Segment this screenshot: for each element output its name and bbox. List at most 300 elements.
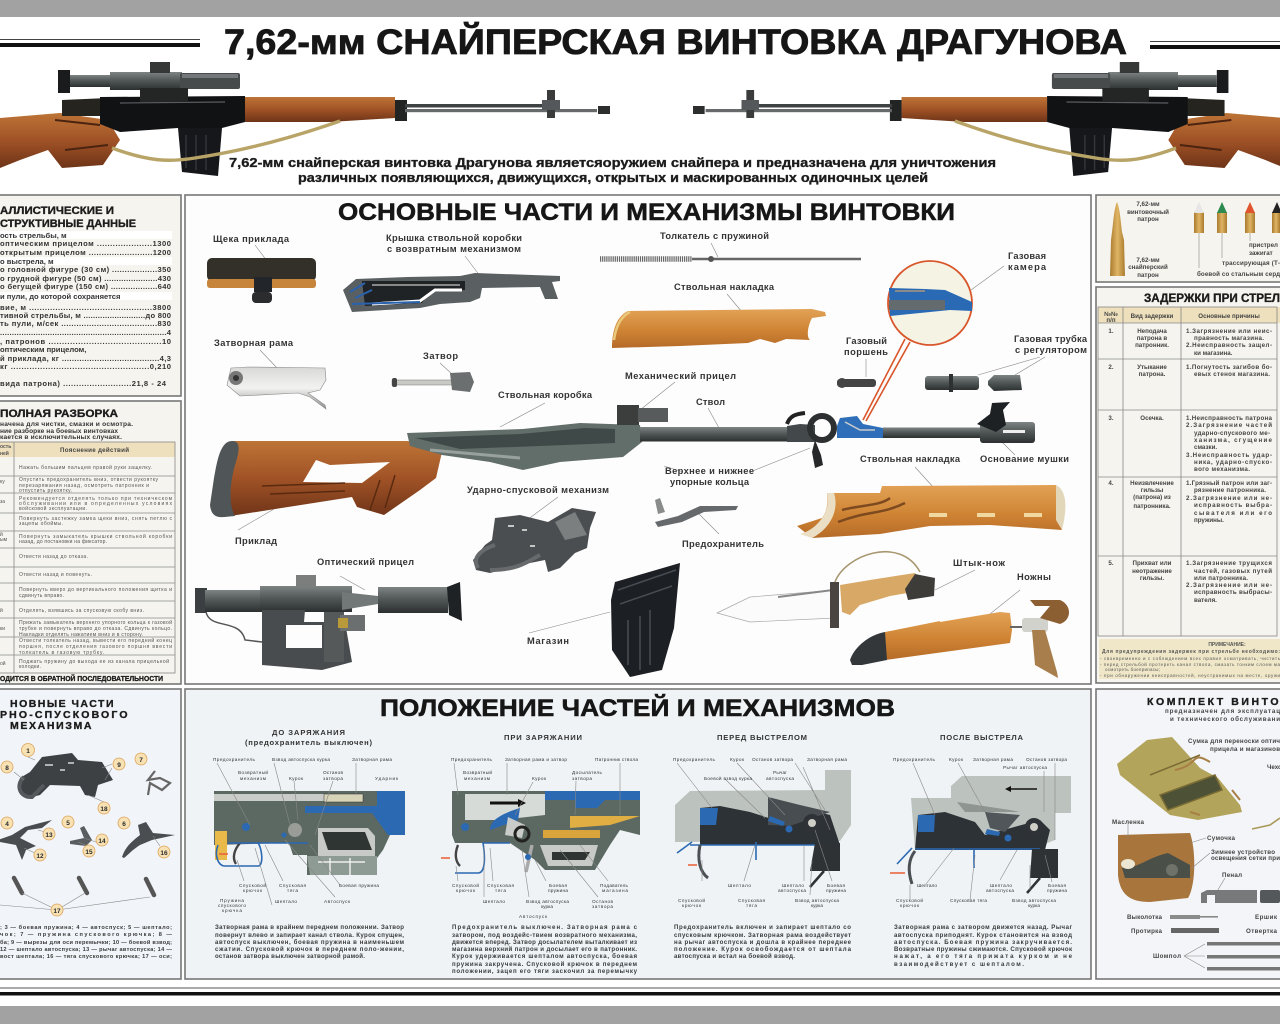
stoppage table: ханизма, сгущение	[1194, 437, 1273, 444]
description: повернут влево и запирает канал ствола. Курок спущен,	[215, 932, 404, 939]
stoppage table: 1.Загрязнение или неис-	[1186, 328, 1272, 335]
column heading: ПРИ ЗАРЯЖАНИИ	[504, 733, 582, 742]
disassembly table: Повернуть застежку замка щеки вниз, снять петлю с	[19, 516, 173, 522]
description: Возвратные пружины сжимаются. Спусковой крючок	[894, 946, 1073, 953]
stoppage table: гильзы	[1141, 487, 1163, 494]
description: Затворная рама с затвором движется назад. Рычаг	[894, 924, 1072, 931]
bullet labels: трассирующая (Т-	[1222, 260, 1280, 267]
kit labels: Пенал	[1222, 872, 1242, 879]
stoppage table: сывателя или его	[1194, 510, 1272, 517]
data rows: открытым прицелом .........................1200	[0, 248, 171, 257]
bottom rules	[0, 988, 1280, 996]
diagram labels: Шептало	[483, 899, 505, 904]
part labels: Основание мушки	[980, 454, 1069, 464]
data rows: кг ....................................................0,210	[0, 362, 171, 371]
column heading: (предохранитель выключен)	[245, 738, 372, 747]
panel heading: СТРУКТИВНЫЕ ДАННЫЕ	[0, 218, 136, 230]
diagram labels: крючок	[900, 903, 920, 908]
diagram labels: автоспуска	[778, 888, 806, 893]
kit labels: Сумка для переноски оптич	[1188, 738, 1280, 745]
stoppage table: Утыкание	[1137, 364, 1167, 371]
panel heading: ЗАДЕРЖКИ ПРИ СТРЕЛ	[1144, 291, 1280, 305]
bottom grey frame bar	[0, 1006, 1280, 1024]
panel heading: МЕХАНИЗМА	[10, 720, 93, 732]
part: axis pins	[14, 878, 154, 895]
part labels: Ствольная накладка	[674, 282, 775, 292]
part labels: Магазин	[527, 636, 569, 646]
diagram labels: Взвод автоспуска	[1012, 898, 1056, 903]
note: осмотреть боеприпасы;	[1105, 667, 1160, 672]
disassembly table: Отделять, взявшись за спусковую скобу вниз.	[19, 608, 144, 614]
panel: main parts	[185, 195, 1091, 684]
diagram labels: Предохранитель	[893, 757, 936, 762]
description: положении, зацеп его тяги заскочил за перемычку	[452, 968, 638, 975]
diagram	[441, 763, 640, 897]
part labels: Верхнее и нижнее	[665, 466, 754, 476]
stoppage table: 1.Загрязнение трущихся	[1186, 560, 1272, 567]
item: leather pouch	[1118, 833, 1194, 902]
disassembly table: Отвести назад и повенуть.	[19, 572, 92, 578]
data rows: о выстрела, м	[0, 257, 54, 266]
stoppage table: патронник.	[1135, 342, 1169, 349]
kit labels: Шомпол	[1153, 953, 1181, 960]
description: Затворная рама в крайнем переднем положении. Затвор	[215, 924, 404, 931]
column: before loading	[213, 728, 405, 960]
cartridge labels: снайперский	[1128, 264, 1168, 271]
part: gas tube with regulator	[925, 374, 1022, 392]
part: upper handguard	[612, 309, 826, 348]
diagram labels: затвора	[572, 776, 592, 781]
diagram labels: Рычаг	[773, 770, 787, 775]
left title rule	[0, 39, 200, 47]
part labels: камера	[1008, 262, 1047, 272]
stoppage table: 1.Неисправность патрона	[1186, 415, 1273, 422]
description: автоспуска и встал на боевой взвод.	[674, 953, 795, 960]
stoppage table: 2.Загрязнение или не-	[1186, 582, 1272, 589]
diagram labels: Ударник	[375, 776, 399, 781]
diagram labels: Курок	[949, 757, 964, 762]
diagram labels: тяга	[746, 903, 757, 908]
cartridge labels: патрон	[1137, 272, 1159, 279]
diagram labels: Автоспуск	[519, 914, 548, 919]
rifle: right mirrored view	[693, 62, 1280, 176]
stoppage table: 2.Загрязнение частей	[1186, 422, 1272, 429]
note: - своевременно и с соблюдением всех правил осматривать, чистить	[1100, 656, 1280, 661]
stoppage table: смазки.	[1194, 444, 1217, 451]
stoppage table: (патрона) из	[1133, 494, 1171, 501]
description: пружина закручена. Спусковой крючок в переднем	[452, 961, 637, 968]
diagram labels: Спусковой	[239, 882, 266, 888]
description	[215, 924, 404, 960]
panel heading: РНО-СПУСКОВОГО	[0, 709, 129, 721]
disassembly table: сдвинуть вправо.	[19, 593, 64, 599]
diagram labels: крючок	[456, 888, 476, 893]
note	[1099, 639, 1280, 679]
description: на рычаг автоспуска и дошла в крайнее переднее	[674, 939, 852, 946]
stoppage table: евых стенок магазина.	[1194, 371, 1270, 378]
diagram labels: Взвод автоспуска	[526, 899, 569, 904]
kit labels: Протирка	[1131, 928, 1163, 935]
diagram labels: Курок	[730, 757, 745, 762]
diagram labels: автоспуска	[986, 888, 1014, 893]
part: bolt carrier	[227, 367, 326, 409]
stoppage table: или патронника.	[1194, 575, 1248, 582]
panel heading: КОМПЛЕКТ ВИНТО	[1147, 696, 1280, 708]
diagram labels: Останов затвора	[1026, 757, 1067, 762]
diagram labels: Боевая	[549, 883, 567, 888]
stoppage table: вого механизма.	[1194, 466, 1250, 473]
badge numbers: 4	[5, 821, 9, 828]
subtitle: 7,62-мм снайперская винтовка Драгунова являетсяоружием снайпера и предназначена для уничтожения	[229, 155, 996, 170]
part labels: Механический прицел	[625, 371, 736, 381]
diagram labels: Рычаг автоспуска	[1003, 765, 1047, 770]
badge numbers: 12	[36, 853, 44, 860]
kit labels: Масленка	[1112, 819, 1145, 826]
stoppage table: 3.	[1108, 415, 1114, 422]
part labels: Ствольная накладка	[860, 454, 961, 464]
part labels: Толкатель с пружиной	[660, 231, 769, 241]
part labels: Крышка ствольной коробки	[386, 233, 522, 243]
stoppage table: Вид задержки	[1131, 313, 1174, 320]
stoppage table: вателя.	[1194, 597, 1217, 604]
part labels: Ударно-спусковой механизм	[467, 485, 609, 495]
legend	[0, 924, 172, 960]
disassembly table: Опустить предохранитель вниз, отвести рукоятку	[19, 477, 158, 483]
diagram labels	[451, 757, 638, 919]
diagram labels: Останов	[323, 770, 344, 775]
badge numbers: 5	[66, 820, 70, 827]
diagram labels: Затворная рама	[807, 757, 847, 762]
column: during loading	[441, 733, 640, 975]
rifle: left side view	[0, 62, 610, 176]
data rows: о бегущей фигуре (150 см) ...................640	[0, 282, 171, 291]
diagram labels: тяга	[287, 888, 298, 893]
panel subheading: и технического обслуживани	[1170, 716, 1280, 723]
data rows: вида патрона) ..........................21,8 - 24	[0, 379, 167, 388]
subtitle	[229, 155, 996, 185]
diagram labels: Пружина	[220, 898, 244, 903]
legend: чок; 7 — пружина спускового крючка; 8 —	[0, 932, 172, 938]
diagram labels	[893, 757, 1067, 908]
stoppage table: Неизвлечение	[1130, 480, 1174, 487]
part labels: Газовая трубка	[1014, 334, 1088, 344]
badge numbers: 7	[139, 757, 143, 764]
diagram labels: крючок	[682, 903, 702, 908]
stoppage table: рязнение патронника.	[1194, 487, 1266, 494]
disassembly table: Нажать большим пальцем правой руки защелку.	[19, 464, 152, 471]
stoppage table: №№	[1104, 311, 1118, 318]
panel heading	[0, 698, 129, 732]
diagram	[675, 763, 851, 895]
disassembly table: ку	[0, 479, 5, 485]
diagram labels: Затворная рама	[352, 757, 392, 762]
disassembly table: трубке и повернуть вправо до отказа. Сдвинуть кольцо.	[19, 626, 172, 632]
stoppage table: 1.	[1108, 328, 1114, 335]
column: before firing	[673, 733, 852, 960]
data rows: ть пули, м/сек ......................................830	[0, 319, 171, 328]
diagram labels: Возвратный	[463, 769, 492, 775]
diagram labels: автоспуска	[766, 776, 794, 781]
description: автоспуск выключен, боевая пружина в наименьшем	[215, 939, 404, 946]
disassembly table: войсковой эксплуатации.	[19, 505, 87, 512]
diagram labels: Патронник ствола	[595, 757, 638, 762]
diagram	[890, 763, 1071, 900]
table footer: ОДИТСЯ В ОБРАТНОЙ ПОСЛЕДОВАТЕЛЬНОСТИ	[0, 674, 163, 683]
diagram labels: Спусковая	[487, 883, 514, 888]
column heading: ДО ЗАРЯЖАНИЯ	[272, 728, 345, 737]
part labels: Оптический прицел	[317, 557, 414, 567]
right title rule	[1150, 41, 1280, 49]
diagram labels: Курок	[289, 776, 304, 781]
stoppage table: 1.Грязный патрон или заг-	[1186, 480, 1272, 487]
part: pusher with spring	[600, 256, 861, 262]
item: sling fragment	[1252, 818, 1280, 829]
legend: 12 — шептало автоспуска; 13 — рычаг автоспуска; 14 —	[0, 947, 172, 953]
diagram labels: магазина	[602, 888, 628, 893]
cartridge labels: патрон	[1137, 216, 1159, 223]
badge numbers: 18	[100, 806, 108, 813]
part: sear	[70, 826, 92, 846]
bullets	[1194, 202, 1280, 233]
column: after firing	[890, 733, 1073, 968]
diagram labels: Возвратный	[238, 769, 268, 775]
intro text	[0, 421, 133, 441]
diagram labels: крючок	[243, 888, 263, 893]
badge numbers: 8	[5, 765, 9, 772]
diagram labels: Взвод автоспуска курка	[272, 757, 330, 762]
top grey frame bar	[0, 0, 1280, 17]
part: trigger	[122, 822, 175, 858]
disassembly table: перезаряжания назад, осмотреть патронник и	[19, 483, 149, 489]
column heading: ПЕРЕД ВЫСТРЕЛОМ	[717, 733, 807, 742]
data rows	[0, 231, 172, 388]
badge numbers: 16	[160, 850, 168, 857]
disassembly table: Отвести назад до отказа.	[19, 554, 88, 560]
stoppage table: 1.Погнутость загибов бо-	[1186, 364, 1272, 371]
kit labels: Выколотка	[1127, 914, 1163, 921]
diagram labels: Останов затвора	[752, 757, 793, 762]
panel heading	[0, 205, 136, 230]
part labels: Газовый	[846, 336, 887, 346]
part: lower handguard	[797, 485, 1065, 538]
item: cleaning rods	[1207, 942, 1280, 970]
item: pencil case	[1201, 890, 1280, 903]
description: автоспуска приподнят. Курок становится на взвод	[894, 932, 1072, 939]
diagram labels: Боевая пружина	[339, 883, 379, 888]
part labels: Щека приклада	[213, 234, 290, 244]
disassembly table: Повернуть вверх до вертикального положения щитка и	[19, 587, 172, 593]
stoppage table: 2.Загрязнение или не-	[1186, 495, 1272, 502]
diagram labels: Шептало	[990, 883, 1012, 888]
item: cleaning wipe	[1171, 928, 1219, 933]
cartridge labels: 7,62-мм	[1136, 201, 1160, 208]
column heading: ПОСЛЕ ВЫСТРЕЛА	[940, 733, 1024, 742]
disassembly table: толкатель в газовую трубку.	[19, 650, 104, 656]
kit labels: прицела и магазинов	[1210, 746, 1280, 753]
diagram labels: Спусковой	[678, 897, 705, 903]
panel: trigger mechanism parts	[0, 689, 181, 979]
part: receiver cover	[343, 273, 560, 312]
disassembly table: Накладки отделять нажатием вниз и в сторону.	[19, 632, 143, 638]
disassembly table: назад, до постановки на фиксатор.	[19, 539, 107, 545]
diagram labels: курка	[1028, 903, 1040, 908]
number badges	[1, 744, 170, 916]
panel subheading	[1165, 708, 1280, 723]
description: спусковым крючком. Затворная рама воздействует	[674, 932, 851, 939]
panel: firing stoppages	[1096, 287, 1280, 683]
stoppage table: исправность выбрасы-	[1194, 589, 1272, 596]
description: нажат, а его тяга прижата курком и не	[894, 953, 1073, 960]
bullet labels	[1197, 242, 1280, 278]
kit labels: Зимнее устройство	[1211, 849, 1275, 856]
bullet labels: зажигат	[1249, 250, 1273, 257]
part labels: Ствол	[696, 397, 725, 407]
disassembly table: поршня, после отделения газового поршня ввести	[19, 644, 172, 650]
stoppage table: гильзы.	[1140, 575, 1164, 582]
panel: rifle kit	[1096, 689, 1280, 979]
disassembly table: Прижать замыкатель верхнего упорного кольца к газовой	[19, 619, 172, 626]
disassembly table: й	[0, 607, 3, 614]
stoppage table: 2.Неисправность защел-	[1186, 342, 1272, 349]
part labels: с регулятором	[1015, 345, 1087, 355]
part labels: Предохранитель	[682, 539, 764, 549]
part labels: Ножны	[1017, 572, 1051, 582]
part labels: Затвор	[423, 351, 458, 361]
diagram labels: Досылатель	[572, 770, 603, 775]
disassembly table: ки	[0, 626, 5, 632]
kit leaders	[1128, 824, 1225, 968]
disassembly table: обслуживании или в определенных условиях	[19, 501, 172, 507]
disassembly table: за	[0, 499, 5, 505]
data rows: о грудной фигуре (50 см) ......................430	[0, 274, 171, 283]
diagram labels: тяга	[495, 888, 506, 893]
disassembly table: ой	[0, 660, 6, 667]
kit labels: освещения сетки при	[1211, 855, 1280, 862]
disassembly table: отпустить рукоятку.	[19, 488, 72, 494]
stoppage table	[1098, 307, 1280, 636]
diagram labels: затвора	[323, 776, 343, 781]
description	[452, 924, 638, 975]
part: safety lever	[655, 498, 738, 527]
note: - перед стрельбой протереть канал ствола, смазать тонким слоем ма	[1100, 662, 1280, 667]
part: scabbard	[850, 600, 1069, 678]
data rows: ......................................................................4	[0, 328, 172, 337]
item: punch	[1170, 915, 1218, 919]
panel: positions of parts	[185, 689, 1091, 979]
part: bayonet	[717, 552, 935, 628]
diagram labels: Спусковая тяга	[950, 898, 987, 903]
intro text: начена для чистки, смазки и осмотра.	[0, 421, 133, 428]
description: взаимодействует с шепталом.	[894, 961, 1024, 968]
data rows: оптическим прицелом .....................1300	[0, 239, 171, 248]
sniper cartridge	[1110, 202, 1125, 276]
description	[674, 924, 852, 960]
disassembly table: ней	[0, 450, 9, 457]
stoppage table: Прихват или	[1133, 560, 1172, 567]
stoppage table: ки магазина.	[1194, 350, 1233, 357]
part: automatic sear	[0, 820, 52, 860]
kit labels: Ершик	[1255, 914, 1278, 921]
part: assembled rifle	[210, 402, 1035, 517]
data rows: ость стрельбы, м	[0, 231, 67, 240]
diagram labels: Затворная рама и затвор	[505, 757, 567, 762]
cartridge labels: винтовочный	[1127, 209, 1169, 216]
part labels: Приклад	[235, 536, 277, 546]
diagram labels: механизм	[464, 776, 490, 781]
diagram labels: курка	[541, 904, 553, 909]
diagram labels	[673, 757, 847, 908]
description: затвором, под воздейс-твием возвратного механизма,	[452, 932, 637, 939]
intro text: кается в исключительных случаях.	[0, 434, 122, 441]
disassembly table: Повернуть замыкатель крышки ствольной коробки	[19, 533, 172, 540]
part labels	[213, 231, 1088, 646]
data rows: й приклада, кг .......................................4,3	[0, 354, 171, 363]
description: движется вперед. Затвор досылателем выталкивает из	[452, 939, 637, 946]
part labels: Штык-нож	[953, 558, 1005, 568]
description: сжатии. Спусковой крючок в переднем поло-жении,	[215, 946, 404, 953]
stoppage table: 4.	[1108, 480, 1114, 487]
diagram labels: Подаватель	[600, 883, 629, 888]
description: автоспуска. Боевая пружина закручивается.	[894, 939, 1072, 946]
part: trigger housing	[18, 753, 113, 798]
legend: ; 3 — боевая пружина; 4 — автоспуск; 5 — шептало;	[0, 924, 172, 931]
disassembly table: Отвести толкатель назад, вывести его передний конец	[19, 637, 172, 644]
cartridge labels	[1127, 201, 1169, 279]
stoppage table: Неподача	[1137, 328, 1167, 335]
data rows: тивной стрельбы, м ..........................до 800	[0, 311, 171, 320]
badge numbers: 13	[45, 832, 53, 839]
part labels: Газовая	[1008, 251, 1046, 261]
legend: ба; 9 — вырезы для оси перемычки; 10 — боевой взвод;	[0, 939, 172, 946]
disassembly table	[0, 442, 175, 673]
legend: вост шептала; 16 — тяга спускового крючка; 17 — оси;	[0, 954, 172, 960]
disassembly table: ость	[0, 444, 11, 450]
badge numbers: 1	[26, 748, 30, 755]
diagram labels	[213, 757, 399, 913]
part labels: с возвратным механизмом	[387, 244, 521, 254]
diagram labels: пружина	[826, 888, 846, 893]
diagram labels: Предохранитель	[213, 757, 256, 762]
diagram labels: крючка	[222, 908, 242, 913]
diagram labels: механизм	[240, 776, 266, 781]
bullet labels: боевой со стальным серд	[1197, 271, 1280, 278]
subtitle: различных появляющихся, движущихся, открытых и маскированных одиночных целей	[298, 170, 928, 185]
disassembly table: Пояснение действий	[60, 447, 129, 454]
part labels: поршень	[844, 347, 888, 357]
diagram labels: Спусковая	[279, 883, 306, 888]
badge numbers: 14	[98, 838, 106, 845]
diagram labels: Спусковой	[896, 897, 923, 903]
panel heading: ОСНОВНЫЕ ЧАСТИ И МЕХАНИЗМЫ ВИНТОВКИ	[338, 199, 955, 226]
intro text: ние разборке на боевых винтовках	[0, 427, 118, 435]
stoppage table: частей, газовых путей	[1194, 568, 1272, 575]
description: останов затвора выключен затворной рамой.	[215, 953, 365, 960]
panel: full disassembly	[0, 401, 181, 684]
diagram labels: Шептало	[782, 883, 804, 888]
kit labels: Сумочка	[1207, 835, 1236, 842]
diagram labels: Автоспуск	[324, 899, 351, 904]
leader lines	[238, 243, 1045, 633]
data rows: о головной фигуре (30 см) ..................350	[0, 265, 171, 274]
badge numbers: 6	[122, 821, 126, 828]
bullet leaders	[1199, 233, 1250, 268]
part: gas piston	[837, 378, 876, 388]
stoppage table: 2.	[1108, 364, 1114, 371]
bullet labels: пристрел	[1249, 242, 1278, 249]
part: magazine	[611, 563, 680, 677]
stoppage table: Осечка.	[1140, 415, 1164, 422]
callout: gas chamber circle	[863, 261, 972, 421]
